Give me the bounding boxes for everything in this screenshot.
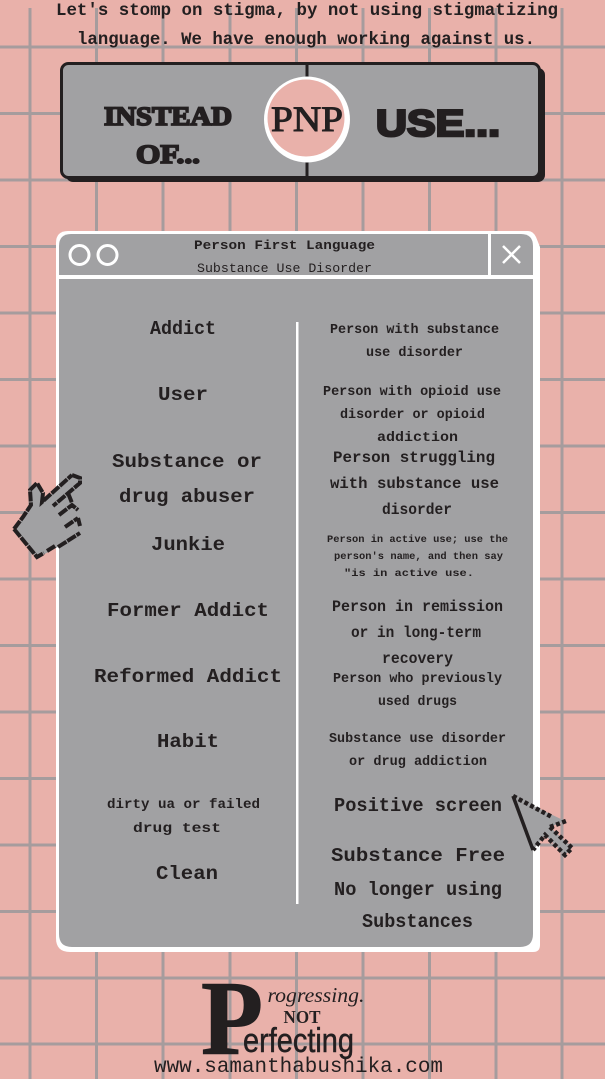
column: person first alternatives: Person with substance [330,322,499,338]
column: person first alternatives: Person in active use; use the [327,534,508,546]
column: person first alternatives: or in long-term [351,624,481,642]
panel: person first language window [56,231,540,952]
PNP circle badge [264,76,350,162]
column: person first alternatives: Substances [362,911,473,933]
column: stigmatizing terms: drug test [133,821,221,837]
column: person first alternatives: Person with opioid use [323,384,501,400]
intro text: language. We have enough working against us. [77,31,535,50]
column: person first alternatives: "is in active use. [344,568,474,580]
PNP circle badge: PNP [271,99,343,139]
column: stigmatizing terms: Clean [156,863,218,885]
column: stigmatizing terms: Reformed Addict [94,666,282,688]
website url: www.samanthabushika.com [154,1056,443,1079]
column: person first alternatives: addiction [377,430,458,446]
logo: progressing not perfecting: NOT [284,1007,320,1027]
column: person first alternatives: Substance use disorder [329,731,506,747]
intro text [56,2,558,50]
column: stigmatizing terms: Habit [157,731,219,753]
logo: progressing not perfecting: erfecting [243,1022,354,1060]
icon: arrow cursor [513,796,572,855]
icon: pointing hand cursor [14,475,81,558]
column: person first alternatives: No longer using [334,879,502,901]
column: stigmatizing terms: Substance or [112,451,262,473]
column: person first alternatives: Person who previously [333,671,503,687]
column: stigmatizing terms: dirty ua or failed [107,797,260,813]
intro text: Let's stomp on stigma, by not using stigmatizing [56,2,558,21]
banner: instead of / PNP / use [62,64,545,182]
column: person first alternatives: recovery [382,650,453,668]
column: person first alternatives: use disorder [366,345,463,361]
column: person first alternatives: Positive screen [334,795,502,817]
logo: progressing not perfecting: P [201,960,263,1077]
column: person first alternatives: or drug addiction [349,754,487,770]
column: stigmatizing terms: User [158,384,208,406]
banner heading: use: USE... [376,103,500,144]
column: person first alternatives: disorder or opioid [340,407,485,423]
banner heading: instead of: INSTEAD [104,102,232,131]
column: person first alternatives: Person struggling [333,449,495,467]
logo: progressing not perfecting: rogressing. [268,983,364,1007]
column: stigmatizing terms: Addict [150,318,216,340]
window subtitle: Substance Use Disorder [197,261,372,276]
column: person first alternatives: with substance use [330,475,499,493]
column: person first alternatives: used drugs [378,694,457,710]
logo: progressing not perfecting [201,960,364,1077]
column: person first alternatives: Person in remission [332,598,503,616]
column: stigmatizing terms [94,318,282,885]
column: person first alternatives: disorder [382,501,452,519]
column: stigmatizing terms: drug abuser [119,486,255,508]
column: stigmatizing terms: Junkie [151,534,225,556]
banner heading: instead of [104,102,232,169]
window buttons [70,246,117,264]
banner heading: instead of: OF... [136,140,200,169]
column: person first alternatives [323,322,508,933]
close icon [503,246,520,263]
column: person first alternatives: Substance Free [331,845,505,867]
window title: Person First Language [194,238,375,253]
column: stigmatizing terms: Former Addict [107,600,269,622]
column: person first alternatives: person's name, and then say [334,551,504,563]
